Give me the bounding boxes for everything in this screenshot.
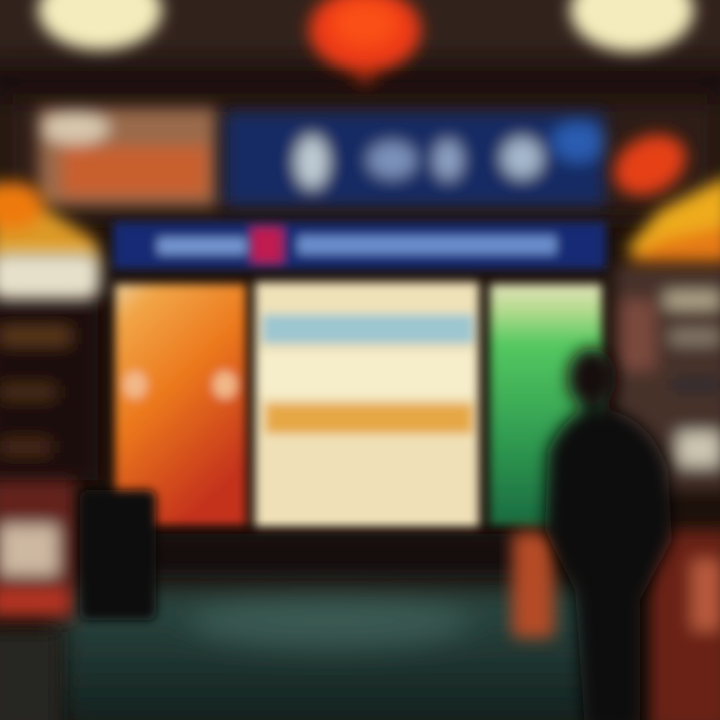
right stall [512, 175, 720, 720]
right goods: red [650, 530, 720, 720]
sign: left orange [38, 108, 216, 206]
left stall [0, 180, 100, 720]
panel: orange [115, 284, 246, 526]
panel highlight right [213, 371, 237, 399]
panel: green [490, 284, 602, 526]
right stall shelves [615, 265, 720, 490]
ceiling light: left [38, 0, 162, 50]
banner text blur: left [158, 238, 246, 254]
sign glyph blob 2 [368, 142, 416, 178]
ceiling light: right [570, 0, 694, 52]
floor [60, 588, 600, 720]
left awning: white [0, 252, 100, 300]
sign: blue with white characters [225, 112, 605, 206]
counter: dark base [150, 534, 520, 578]
person body [545, 408, 672, 720]
black bin [80, 490, 156, 620]
table row: light blue [262, 314, 474, 344]
person head [568, 348, 616, 408]
silhouette: person [545, 348, 672, 720]
sign: orange-red emblem [603, 122, 697, 208]
sign glyph blob 1 [296, 136, 328, 188]
orange crates [512, 532, 554, 638]
left goods: red and white [0, 480, 75, 620]
panel highlight left [123, 371, 147, 399]
banner: blue strip [113, 222, 606, 269]
banner red mark [252, 228, 282, 262]
table row: orange [265, 403, 473, 434]
left stall post [0, 632, 58, 720]
table row: lower [258, 442, 478, 524]
banner text blur: right [298, 236, 556, 254]
table row: pale [258, 352, 476, 396]
panel: central cream table [255, 282, 479, 528]
right awning: yellow [625, 175, 720, 262]
left awning: yellow orange [0, 180, 98, 262]
sign glyph blob 3 [434, 140, 462, 180]
ceiling [0, 0, 720, 215]
sign corner accent [552, 122, 604, 162]
sign glyph blob 4 [502, 138, 542, 178]
red lantern [309, 0, 421, 84]
left stall shelves [0, 300, 98, 480]
